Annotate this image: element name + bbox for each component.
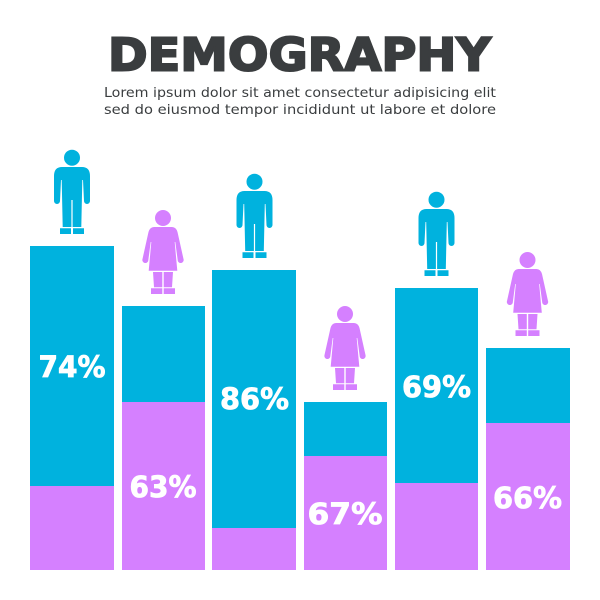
icon: man: [418, 192, 454, 276]
title: DEMOGRAPHY: [108, 28, 492, 81]
icon: man: [236, 174, 272, 258]
bar 2: woman 63%: [122, 210, 205, 570]
bar 6: woman 66%: [486, 252, 570, 570]
bar 3: man 86%: [212, 174, 296, 570]
bar 4: woman 67%: [304, 306, 387, 570]
label: 74%: 74%: [38, 350, 106, 384]
subtitle text: [104, 85, 496, 118]
icon: woman: [507, 252, 548, 336]
icon: man: [54, 150, 90, 234]
label: 86%: 86%: [220, 382, 289, 416]
label: 67%: 67%: [308, 497, 382, 531]
label: 66%: 66%: [493, 481, 562, 515]
icon: woman: [142, 210, 184, 294]
subtitle text: sed do eiusmod tempor incididunt ut labore et dolore: [104, 102, 496, 118]
bar 5: man 69%: [395, 192, 478, 570]
icon: woman: [324, 306, 366, 390]
bar 1: man 74%: [30, 150, 114, 570]
label: 69%: 69%: [402, 370, 471, 404]
label: 63%: 63%: [130, 470, 196, 504]
subtitle text: Lorem ipsum dolor sit amet consectetur adipisicing elit: [104, 85, 496, 101]
